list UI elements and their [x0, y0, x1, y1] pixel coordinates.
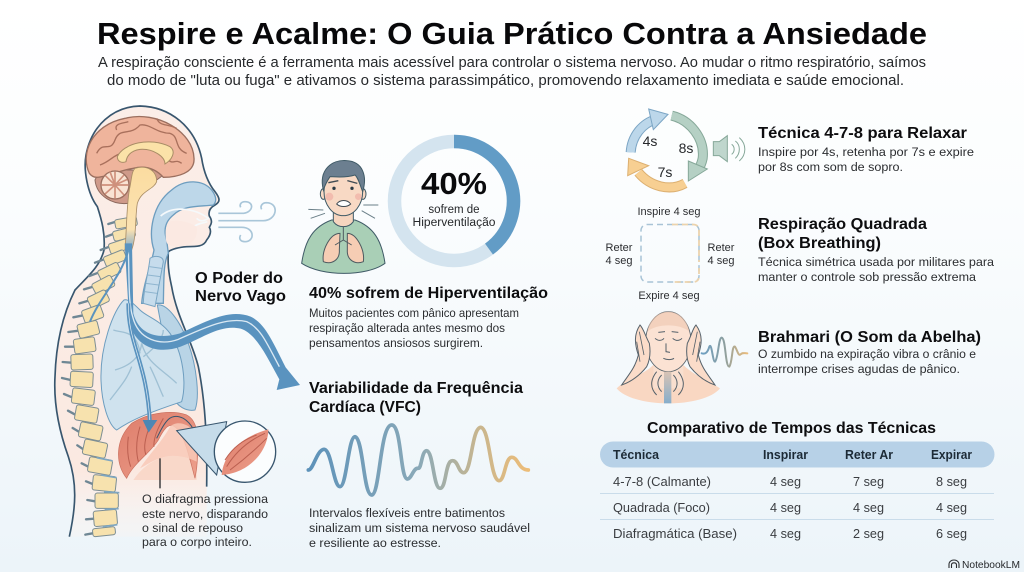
- comparison table: 7 seg: [853, 474, 884, 489]
- leader line: [158, 458, 162, 488]
- diagram: box breathing: Reter: [606, 242, 633, 254]
- comparison table: 4 seg: [936, 500, 967, 515]
- comparison table: Expirar: [931, 448, 972, 462]
- comparison table: 2 seg: [853, 526, 884, 541]
- diaphragm caption: O diafragma pressiona: [142, 492, 268, 506]
- block: 4-7-8 text: por 8s com som de sopro.: [758, 160, 903, 174]
- diagram: box breathing: [606, 206, 735, 302]
- intro text: [98, 54, 926, 89]
- block: box breathing text: [758, 216, 994, 284]
- comparison table: 6 seg: [936, 526, 967, 541]
- block: hyperventilation text: respiração alterada antes mesmo dos: [309, 321, 505, 335]
- title: Respire e Acalme: O Guia Prático Contra a Ansiedade: [97, 16, 927, 51]
- body silhouette: [55, 106, 219, 537]
- cycle labels: 7s: [658, 164, 672, 180]
- brain: [86, 117, 194, 250]
- label: O Poder do Nervo Vago: [195, 270, 286, 305]
- diagram: box breathing: Expire 4 seg: [638, 290, 700, 302]
- inset: muscle magnifier: [177, 421, 276, 482]
- anatomy illustration: human profile: [55, 106, 300, 537]
- breath wind icon: [218, 202, 275, 242]
- block: hyperventilation text: 40% sofrem de Hiperventilação: [309, 285, 548, 302]
- comparison table: 4 seg: [770, 474, 801, 489]
- comparison table: Reter Ar: [845, 448, 893, 462]
- diaphragm caption: este nervo, disparando: [142, 507, 268, 521]
- diaphragm caption: [142, 492, 268, 549]
- comparison table: Inspirar: [763, 448, 808, 462]
- donut chart 40%: 40%: [421, 166, 487, 201]
- diaphragm caption: para o corpo inteiro.: [142, 535, 252, 549]
- VFC text: [309, 506, 530, 550]
- VFC text: sinalizam um sistema nervoso saudável: [309, 521, 530, 535]
- table heading: Comparativo de Tempos das Técnicas: [647, 420, 936, 437]
- block: 4-7-8 text: Inspire por 4s, retenha por 7s e expire: [758, 145, 974, 159]
- icon: humming sound wave: [702, 338, 747, 367]
- block: 4-7-8 text: Técnica 4-7-8 para Relaxar: [758, 125, 967, 142]
- label: O Poder do Nervo Vago: O Poder do: [195, 270, 283, 287]
- icon: person humming with hands on ears: [617, 312, 720, 403]
- comparison table: Técnica: [613, 448, 660, 462]
- diaphragm muscle: [118, 412, 198, 480]
- airway: [142, 182, 216, 303]
- comparison table: 4 seg: [853, 500, 884, 515]
- diagram: box breathing: Inspire 4 seg: [638, 206, 700, 218]
- block: Brahmari text: [758, 329, 981, 376]
- block: box breathing text: Técnica simétrica usada por militares para: [758, 255, 994, 269]
- block: 4-7-8 text: [758, 125, 974, 174]
- vagus nerve and arrow: [90, 243, 300, 433]
- comparison table: 8 seg: [936, 474, 967, 489]
- block: hyperventilation text: Muitos pacientes com pânico apresentam: [309, 306, 519, 320]
- block: box breathing text: Respiração Quadrada: [758, 216, 927, 233]
- intro text: A respiração consciente é a ferramenta mais acessível para controlar o sistema nervoso. Ao mudar o ritmo respiratório, saímos: [98, 54, 926, 71]
- block: Brahmari text: O zumbido na expiração vibra o crânio e: [758, 347, 976, 361]
- comparison table: 4 seg: [770, 500, 801, 515]
- comparison table: 4 seg: [770, 526, 801, 541]
- block: Brahmari text: Brahmari (O Som da Abelha): [758, 329, 981, 346]
- block: Brahmari text: interrompe crises agudas de pânico.: [758, 362, 960, 376]
- block: VFC heading: [309, 380, 523, 416]
- diagram: box breathing: 4 seg: [606, 255, 632, 267]
- intro text: do modo de "luta ou fuga" e ativamos o sistema parassimpático, promovendo relaxamento imediata e saúde emocional.: [107, 72, 904, 89]
- icon: 4-7-8 breathing cycle: [628, 109, 745, 187]
- icon: anxious person with lungs: [302, 161, 385, 273]
- label: O Poder do Nervo Vago: Nervo Vago: [195, 288, 286, 305]
- donut chart 40%: Hiperventilação: [412, 217, 496, 229]
- VFC text: Intervalos flexíveis entre batimentos: [309, 506, 505, 520]
- diaphragm caption: o sinal de repouso: [142, 521, 243, 535]
- block: box breathing text: (Box Breathing): [758, 235, 881, 252]
- block: hyperventilation text: [309, 285, 548, 350]
- chart: heart rate variability wave: [308, 425, 528, 495]
- block: box breathing text: manter o controle sob pressão extrema: [758, 270, 976, 284]
- footer: NotebookLM logo: NotebookLM: [962, 559, 1020, 571]
- comparison table: Diafragmática (Base): [613, 526, 737, 541]
- lungs: [101, 300, 197, 430]
- diagram: box breathing: Reter: [708, 242, 735, 254]
- diagram: box breathing: 4 seg: [708, 255, 734, 267]
- cycle labels: 4s: [643, 133, 657, 149]
- comparison table: 4-7-8 (Calmante): [613, 474, 711, 489]
- block: VFC heading: Cardíaca (VFC): [309, 399, 421, 416]
- VFC text: e resiliente ao estresse.: [309, 536, 441, 550]
- comparison table: Quadrada (Foco): [613, 500, 710, 515]
- cycle labels: [643, 133, 693, 180]
- cycle labels: 8s: [679, 140, 693, 156]
- trachea: [143, 256, 163, 307]
- block: hyperventilation text: pensamentos ansiosos surgirem.: [309, 336, 483, 350]
- comparison table: [600, 442, 994, 541]
- block: VFC heading: Variabilidade da Frequência: [309, 380, 523, 397]
- donut chart 40%: sofrem de: [428, 204, 480, 216]
- spine: [62, 216, 138, 537]
- donut chart 40%: [394, 142, 514, 260]
